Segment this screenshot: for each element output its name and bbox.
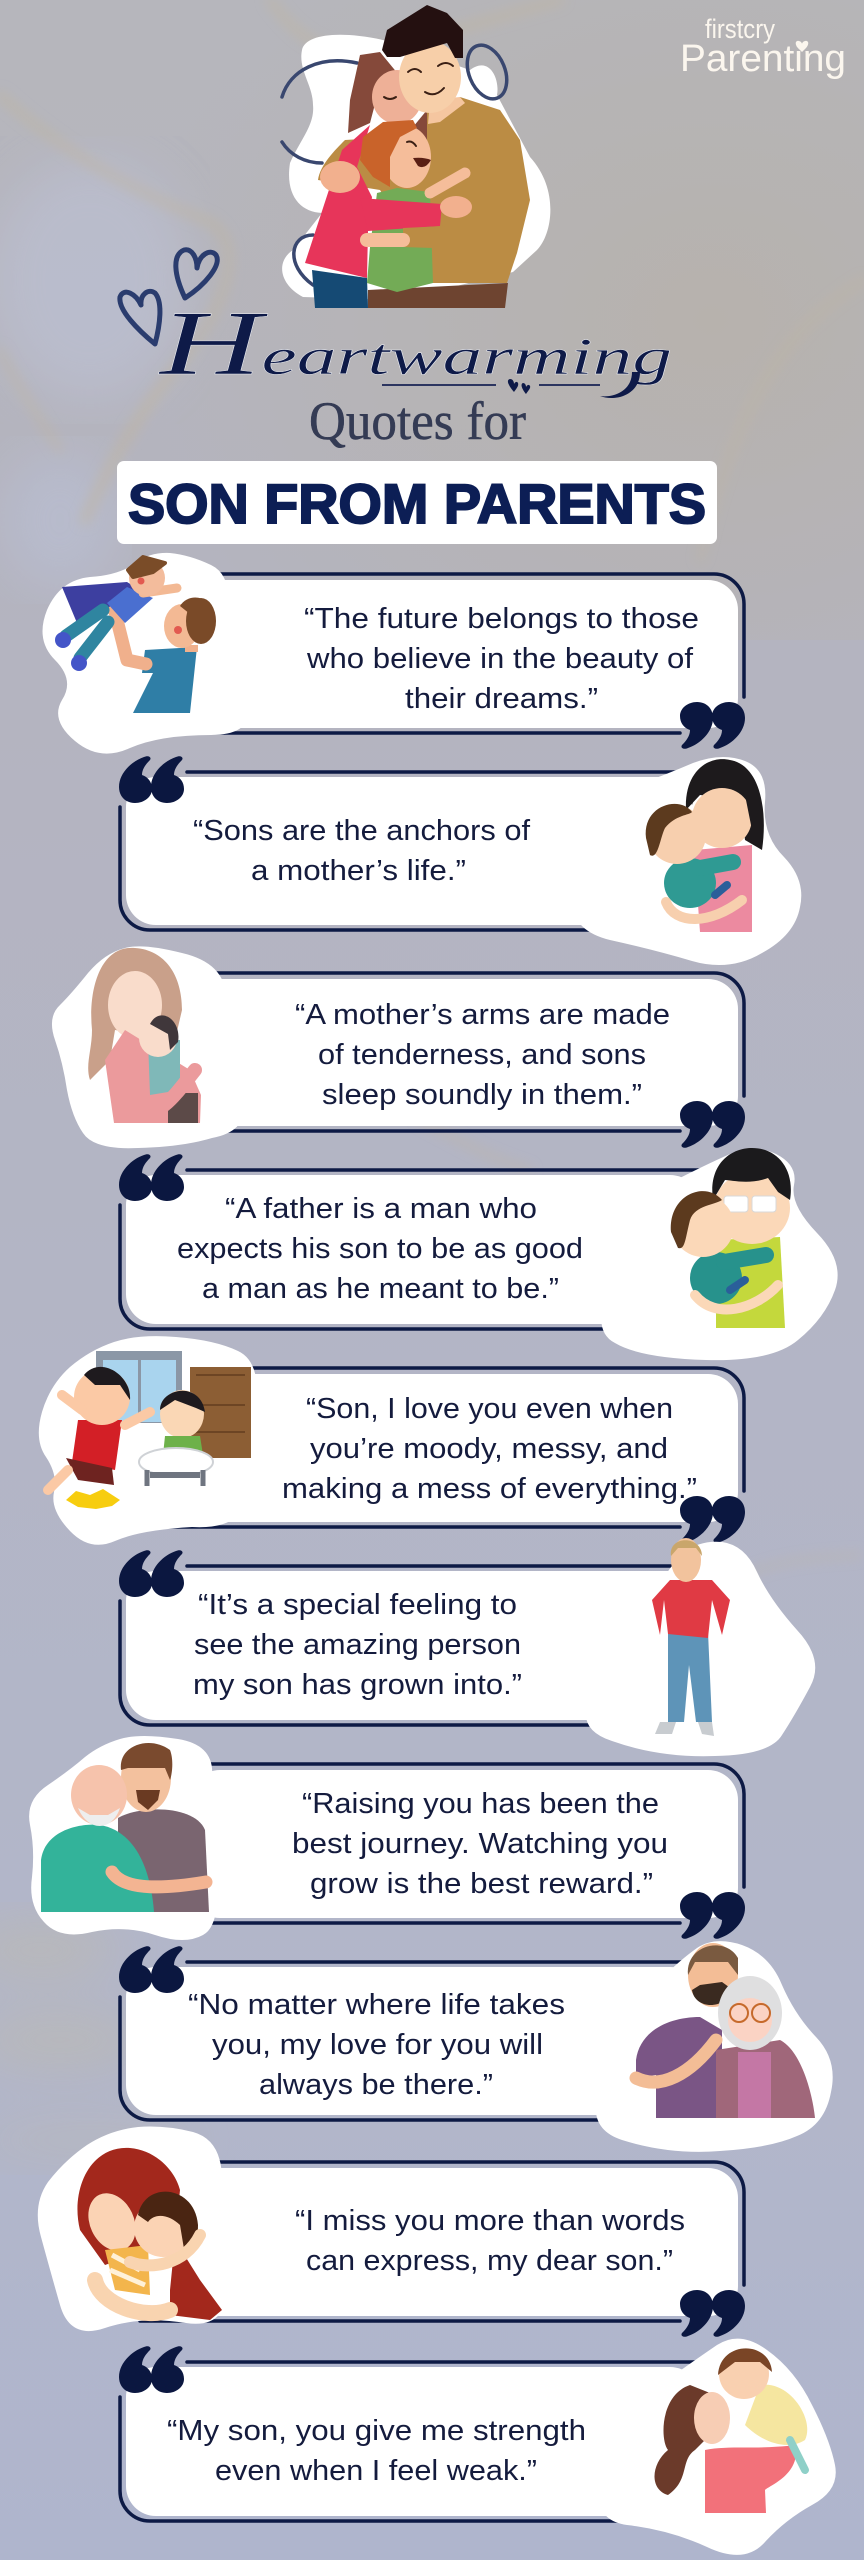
opening quote mark bbox=[119, 1154, 184, 1201]
quote text: “I miss you more than words bbox=[295, 2205, 685, 2237]
quote text: “A father is a man who bbox=[225, 1193, 537, 1225]
closing quote mark bbox=[680, 1496, 745, 1543]
quote text bbox=[193, 815, 531, 887]
illustration: mother hugging son bbox=[573, 757, 801, 965]
illustration: mother cradling son bbox=[52, 946, 245, 1148]
quote text bbox=[167, 2415, 586, 2487]
illustration: mother lifting son bbox=[600, 2339, 836, 2555]
quote text: you’re moody, messy, and bbox=[310, 1433, 668, 1465]
logo: FirstCry Parenting bbox=[680, 14, 846, 80]
quote text: grow is the best reward.” bbox=[310, 1868, 653, 1900]
quote text bbox=[193, 1589, 522, 1701]
logo: FirstCry Parenting: Parenting bbox=[680, 38, 846, 80]
quote text bbox=[177, 1193, 583, 1305]
opening quote mark bbox=[119, 1946, 184, 1993]
illustration: father with glasses hugging son bbox=[601, 1148, 838, 1360]
quote text: “It’s a special feeling to bbox=[198, 1589, 517, 1621]
quote text: their dreams.” bbox=[405, 683, 598, 715]
illustration: son with elderly father bbox=[29, 1736, 217, 1940]
heading banner: Son From Parents: SON FROM PARENTS bbox=[128, 472, 706, 535]
quote text: sleep soundly in them.” bbox=[322, 1079, 642, 1111]
opening quote mark bbox=[119, 756, 184, 803]
illustration: mother embracing son bbox=[38, 2127, 227, 2331]
quote text: always be there.” bbox=[259, 2069, 493, 2101]
opening quote mark bbox=[119, 2346, 184, 2393]
quote text: “Sons are the anchors of bbox=[193, 815, 531, 847]
title: Heartwarming bbox=[158, 292, 672, 398]
closing quote mark bbox=[680, 1892, 745, 1939]
quote card 1 bbox=[42, 553, 745, 754]
quote card 4 bbox=[119, 1148, 838, 1360]
illustration: grown son standing bbox=[586, 1538, 815, 1756]
quote text bbox=[188, 1989, 565, 2101]
quote text bbox=[295, 999, 670, 1111]
quote text: “My son, you give me strength bbox=[167, 2415, 586, 2447]
title: Heartwarming: H eartwarming bbox=[158, 292, 672, 394]
quote text: “Son, I love you even when bbox=[306, 1393, 673, 1425]
quote text: see the amazing person bbox=[194, 1629, 521, 1661]
quote text: “The future belongs to those bbox=[304, 603, 699, 635]
quote card 10 bbox=[119, 2339, 836, 2555]
quote card 9 bbox=[38, 2127, 745, 2337]
closing quote mark bbox=[680, 1101, 745, 1148]
illustration: messy child and brother in room bbox=[39, 1336, 257, 1545]
icon: hearts bbox=[120, 250, 217, 344]
quote text: “Raising you has been the bbox=[302, 1788, 659, 1820]
illustration: son with elderly mother bbox=[596, 1941, 833, 2152]
quote text: best journey. Watching you bbox=[292, 1828, 668, 1860]
hero illustration: hugging family bbox=[282, 5, 550, 308]
quote text: can express, my dear son.” bbox=[306, 2245, 673, 2277]
quote text bbox=[295, 2205, 685, 2277]
closing quote mark bbox=[680, 2290, 745, 2337]
quote text bbox=[304, 603, 699, 715]
quote text: you, my love for you will bbox=[212, 2029, 543, 2061]
quote text: expects his son to be as good bbox=[177, 1233, 583, 1265]
opening quote mark bbox=[119, 1550, 184, 1597]
quote card 7 bbox=[29, 1736, 745, 1940]
quote text: “A mother’s arms are made bbox=[295, 999, 670, 1031]
quote text: even when I feel weak.” bbox=[215, 2455, 537, 2487]
quote text: of tenderness, and sons bbox=[318, 1039, 646, 1071]
closing quote mark bbox=[680, 702, 745, 749]
quote card 5 bbox=[39, 1336, 745, 1545]
quote text: who believe in the beauty of bbox=[306, 643, 694, 675]
quote text: a man as he meant to be.” bbox=[202, 1273, 559, 1305]
quote card 2 bbox=[119, 756, 801, 965]
quote text: my son has grown into.” bbox=[193, 1669, 522, 1701]
quote text bbox=[282, 1393, 697, 1505]
quote card 6 bbox=[119, 1538, 815, 1756]
subtitle: Quotes for: Quotes for bbox=[309, 391, 526, 451]
quote text: making a mess of everything.” bbox=[282, 1473, 697, 1505]
quote card 8 bbox=[119, 1941, 833, 2152]
logo: FirstCry Parenting: firstcry bbox=[705, 14, 775, 44]
quote text bbox=[292, 1788, 668, 1900]
quote text: a mother’s life.” bbox=[251, 855, 466, 887]
quote card 3 bbox=[52, 946, 745, 1148]
quote text: “No matter where life takes bbox=[188, 1989, 565, 2021]
illustration: dad lifting son in cape bbox=[42, 553, 248, 754]
